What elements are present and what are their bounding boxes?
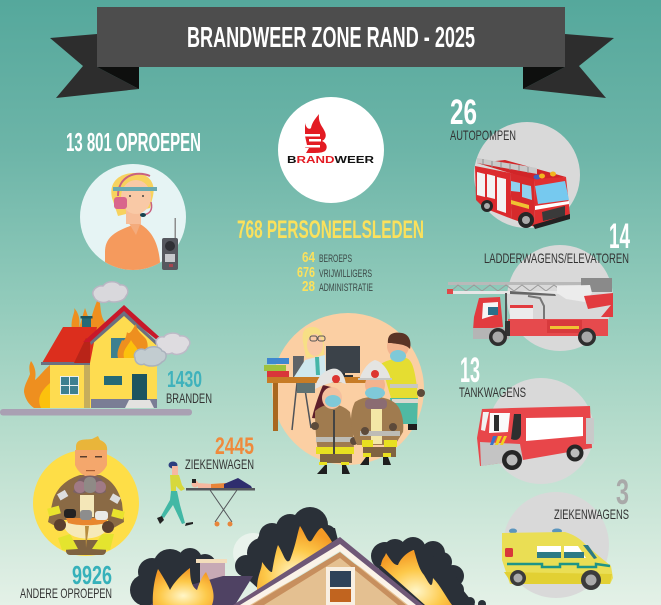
stat: other calls: ANDERE OPROEPEN bbox=[20, 585, 112, 601]
icon: burning house bbox=[0, 282, 192, 416]
coat bbox=[48, 475, 124, 530]
stat: fires: 1430 bbox=[167, 366, 202, 392]
flames behind house bbox=[72, 297, 105, 335]
radio bbox=[162, 218, 178, 270]
stat: ambulances: 3 bbox=[616, 473, 629, 512]
stat: ladder trucks: 14 bbox=[609, 217, 630, 256]
staff breakdown: BEROEPS bbox=[319, 253, 352, 265]
icon: firefighter with rescued cats bbox=[33, 436, 139, 556]
worker in hi-vis bbox=[381, 333, 425, 430]
stat: ladder trucks bbox=[447, 217, 630, 351]
firefighter woman bbox=[311, 369, 358, 474]
stat: ambulance calls: ZIEKENWAGEN bbox=[185, 456, 254, 472]
staff breakdown: 676 bbox=[297, 264, 315, 281]
rescued cats bbox=[64, 509, 108, 520]
chimney bbox=[82, 318, 91, 330]
flames bbox=[153, 526, 452, 605]
heading: staff total: 768 PERSONEELSLEDEN bbox=[237, 216, 424, 244]
stat: pumpers: 26 bbox=[450, 93, 477, 132]
icon: fire engine bbox=[475, 158, 570, 229]
stat: tankers bbox=[459, 351, 594, 484]
stat: pumpers bbox=[450, 93, 580, 229]
desk and monitor bbox=[264, 346, 379, 431]
staff breakdown: 28 bbox=[302, 278, 315, 295]
title banner bbox=[50, 7, 614, 98]
label: AUTOPOMPEN bbox=[450, 127, 516, 143]
gable window bbox=[326, 567, 355, 605]
stat: fires bbox=[166, 366, 212, 406]
dark side roof bbox=[150, 576, 253, 605]
walls bbox=[50, 363, 91, 408]
staff breakdown: ADMINISTRATIE bbox=[319, 282, 373, 294]
window flames bbox=[117, 324, 148, 358]
stat: other calls bbox=[20, 560, 112, 601]
staff breakdown bbox=[297, 249, 373, 295]
staff breakdown: VRIJWILLIGERS bbox=[319, 268, 372, 280]
label: TANKWAGENS bbox=[459, 384, 526, 400]
stat: ambulances bbox=[502, 473, 629, 598]
logo flame bbox=[305, 114, 327, 153]
smoke clouds bbox=[93, 282, 128, 302]
stat: ambulance calls bbox=[185, 433, 254, 472]
stat: tankers: 13 bbox=[460, 351, 480, 390]
firefighter man bbox=[351, 360, 403, 465]
ground line bbox=[0, 409, 192, 416]
icon: stretcher with patient bbox=[157, 462, 255, 526]
legs and boots bbox=[58, 534, 114, 555]
stat: fires: BRANDEN bbox=[166, 390, 212, 406]
office worker bbox=[293, 327, 326, 378]
chimney bbox=[196, 559, 227, 586]
smoke clouds bbox=[130, 507, 486, 605]
pale glow behind smoke bbox=[233, 533, 273, 573]
windows and door bbox=[60, 376, 79, 395]
illustration: burning roof bbox=[130, 507, 486, 605]
title text: BRANDWEER ZONE RAND - 2025 bbox=[187, 22, 475, 54]
stat: ambulance calls: 2445 bbox=[215, 433, 254, 460]
icon: dispatcher with radio bbox=[80, 164, 186, 272]
logo wordmark: BRAND WEER bbox=[287, 154, 375, 166]
staff breakdown: 64 bbox=[302, 249, 316, 266]
logo circle bbox=[278, 97, 384, 203]
house gable bbox=[246, 555, 423, 605]
roofs bbox=[42, 327, 97, 363]
stat: other calls: 9926 bbox=[72, 560, 112, 590]
icon: tanker bbox=[477, 406, 594, 470]
icon: ambulance bbox=[502, 528, 613, 590]
heading: total calls: 13 801 OPROEPEN bbox=[66, 127, 201, 157]
icon: ladder truck bbox=[447, 278, 613, 346]
illustration: staff group bbox=[264, 313, 425, 474]
